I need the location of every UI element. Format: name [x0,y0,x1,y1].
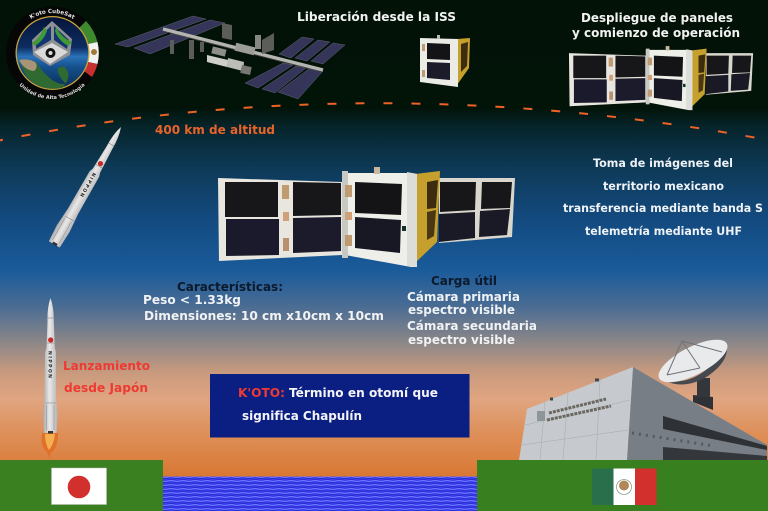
building side dots [632,433,714,446]
dish pedestal [693,395,713,410]
building side [627,367,767,460]
text block: mission functions: Toma de imágenes del [593,156,733,170]
ISS solar arrays, upper right [279,37,345,64]
text block: Carga útil: Cámara primaria [407,289,520,304]
water: ocean [163,476,477,511]
flag: Mexico [592,468,656,505]
text block: mission functions [563,156,763,238]
text block: mission functions: transferencia mediante banda S [563,201,763,215]
heading: Despliegue de paneles: Despliegue de paneles [581,11,733,25]
ground: Mexico side [477,460,768,511]
building front [519,367,633,460]
ISS radiators [170,23,274,59]
building sign [537,399,611,421]
text block: Carga útil [407,273,537,347]
label: Lanzamiento desde Japón: desde Japón [64,380,148,395]
text block: Carga útil: espectro visible [408,302,515,317]
ground: Japan side [0,460,163,511]
label: Lanzamiento desde Japón [63,358,150,395]
illustration: ground station building with dish [519,331,767,460]
ISS solar arrays, lower right [245,63,323,99]
illustration: rocket in flight [48,123,127,248]
label: 400 km de altitud: 400 km de altitud [155,123,275,137]
text block: Características: Características: [177,279,283,294]
heading: Liberación desde la ISS: Liberación desde la ISS [297,10,456,24]
text block: Características [143,279,384,323]
callout: definition of K'OTO: Término en otomí que [289,385,438,400]
illustration: CubeSat with deployed panels, large [218,167,515,267]
illustration: stowed CubeSat [420,35,470,87]
badge: K'oto CubeSat mission patch [6,6,99,100]
roof fixtures [550,380,599,399]
badge: K'oto CubeSat mission patch: Unidad de Alta Tecnología [20,82,85,99]
ISS modules [207,35,261,75]
callout: definition of K'OTO: K'OTO: [238,385,285,400]
flag: Japan [52,468,106,504]
dish [660,347,727,385]
text block: mission functions: territorio mexicano [603,179,724,193]
text block: Carga útil: Cámara secundaria [407,318,537,333]
text block: Características: Dimensiones: 10 cm x10cm x 10cm [144,308,384,323]
callout: definition of K'OTO [210,374,470,438]
text block: Características: Peso < 1.33kg [143,292,241,307]
ISS truss [163,29,323,70]
illustration: CubeSat with deployed panels, small [569,46,753,110]
illustration: International Space Station [115,16,345,99]
orbit line: dashed arc at 400 km [0,103,768,142]
label: Lanzamiento desde Japón: Lanzamiento [63,358,150,373]
illustration: rocket on launch with flame [42,298,58,458]
text block: Carga útil: Carga útil [431,273,497,288]
badge: K'oto CubeSat mission patch: K'oto CubeSat [29,8,75,19]
callout: definition of K'OTO: significa Chapulín [242,408,362,423]
text block: Carga útil: espectro visible [408,332,515,347]
text block: mission functions: telemetría mediante UHF [585,224,742,238]
heading: Despliegue de paneles: y comienzo de operación [572,26,740,40]
heading: Despliegue de paneles [572,11,740,40]
ISS solar arrays, left [115,16,225,54]
